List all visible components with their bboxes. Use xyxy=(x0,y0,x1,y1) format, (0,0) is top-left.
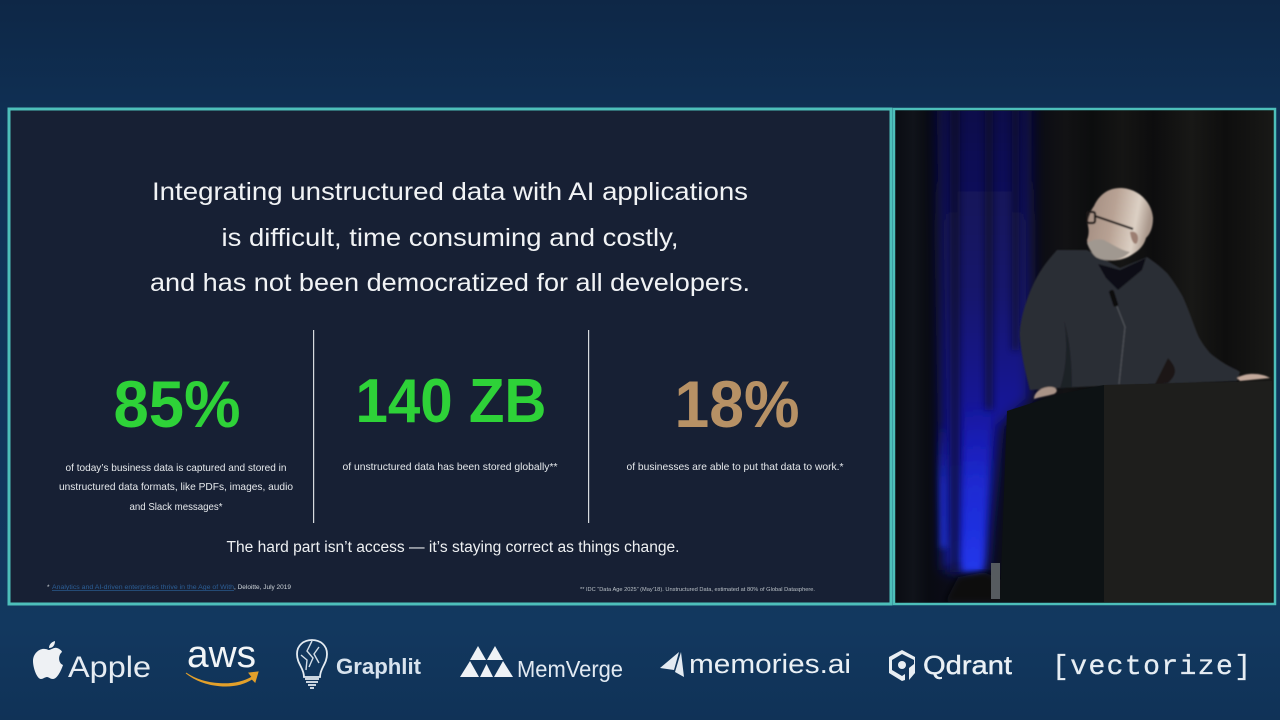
ear xyxy=(1130,232,1138,244)
stat: 140 ZB xyxy=(342,367,558,473)
heading: Integrating unstructured data with AI applications xyxy=(152,178,748,206)
logo: MemVerge xyxy=(460,646,623,682)
stat: 140 ZB: 140 ZB xyxy=(356,367,546,436)
stat: 85% xyxy=(59,367,293,513)
stat: 85%: and Slack messages* xyxy=(130,501,222,513)
panel: speaker video xyxy=(894,60,1275,604)
logo: Graphlit xyxy=(297,640,422,688)
arm shadow xyxy=(1060,320,1072,388)
curtain bright base xyxy=(938,400,992,572)
logo: Qdrant xyxy=(889,650,1013,681)
floor shadow xyxy=(945,572,1002,602)
t-shirt collar xyxy=(1098,258,1146,290)
logo: memories.ai: memories.ai xyxy=(689,649,851,679)
curtain lighting xyxy=(936,60,1032,602)
beard xyxy=(1087,239,1130,260)
curtain folds xyxy=(950,60,1019,572)
stat: 18% xyxy=(626,367,844,473)
lapel mic xyxy=(1109,289,1119,307)
stat: 18%: of businesses are able to put that data to work.* xyxy=(626,461,844,473)
logo: Qdrant: Qdrant xyxy=(923,650,1013,680)
sponsor logos xyxy=(33,634,1251,688)
stat: 140 ZB: of unstructured data has been stored globally** xyxy=(342,461,558,473)
tagline: The hard part isn’t access — it’s staying correct as things change. xyxy=(226,539,680,556)
logo: Apple: Apple xyxy=(68,651,151,684)
stat: 85%: unstructured data formats, like PDFs, images, audio xyxy=(59,481,293,493)
gap under right arm xyxy=(1155,358,1175,384)
logo: vectorize: [vectorize] xyxy=(1052,652,1251,683)
divider left xyxy=(313,330,314,523)
podium xyxy=(1000,381,1272,602)
sweater xyxy=(1020,250,1240,390)
left hand xyxy=(1034,387,1057,399)
heading xyxy=(150,178,750,297)
stat: 18%: 18% xyxy=(674,367,800,441)
footnote left: Analytics and AI-driven enterprises thrive in the Age of With xyxy=(52,584,234,591)
footnote left: * xyxy=(47,584,50,591)
divider right xyxy=(588,330,589,523)
footnote right: ** IDC “Data Age 2025” (May’18). Unstructured Data, estimated at 80% of Global Datasphere. xyxy=(580,587,815,593)
stat: 85%: of today’s business data is captured and stored in xyxy=(66,462,287,474)
panel: slide xyxy=(9,109,891,604)
mic cable xyxy=(1116,304,1125,384)
stage equipment xyxy=(991,563,1000,599)
stat: 85%: 85% xyxy=(114,367,240,441)
logo: Graphlit: Graphlit xyxy=(336,654,422,679)
heading: and has not been democratized for all developers. xyxy=(150,269,750,297)
footnote left: , Deloitte, July 2019 xyxy=(234,584,291,591)
head xyxy=(1087,188,1153,260)
heading: is difficult, time consuming and costly, xyxy=(222,224,678,252)
speaker xyxy=(1020,188,1270,399)
logo: Apple xyxy=(33,641,151,684)
right hand xyxy=(1237,374,1270,381)
curtain blue light xyxy=(936,60,1032,570)
glasses xyxy=(1087,212,1133,229)
logo: aws: aws xyxy=(187,634,256,676)
logo: MemVerge: MemVerge xyxy=(517,656,623,682)
